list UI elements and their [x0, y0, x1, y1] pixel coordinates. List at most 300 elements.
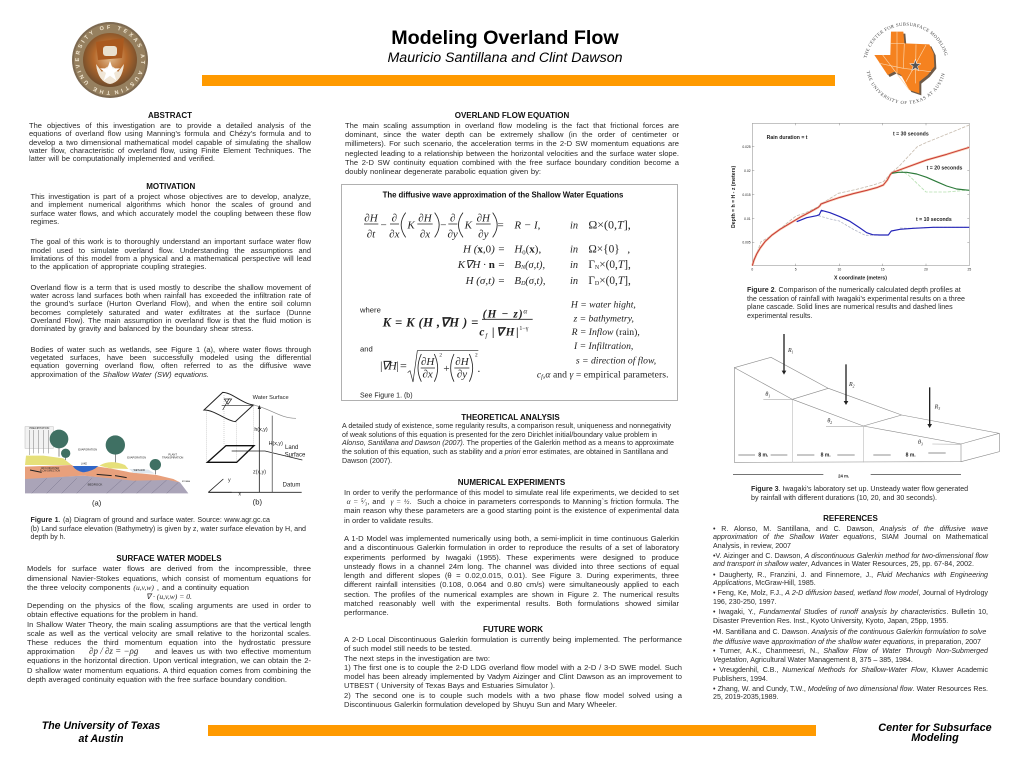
reference: Vreugdenhil [713, 666, 988, 683]
rainfall and slope labels: R [849, 382, 853, 388]
heading: numerical experiments: NUMERICAL EXPERIMENTS [458, 478, 565, 487]
equation system: ∂H [477, 212, 491, 224]
chart annotations: Depth = h = H - z (meters) [731, 166, 737, 228]
theoretical analysis text: Dawson (2007). [342, 457, 392, 465]
variable definitions [537, 299, 668, 381]
variable definitions: R = Inflow (rain), [571, 327, 640, 338]
diagram (a): ground and surface water: GROUNDWATER [41, 467, 60, 470]
abstract text: develop a two dimensional mathematical model capable of simulating the shallow [29, 138, 311, 147]
reference: Feng: • Feng, Ke, Molz, F.J., A 2-D diffusion based, wetland flow model, Journal of Hydrology [713, 589, 988, 597]
surface water models text: depth averaged continuity equation with the free surface boundary condition. [27, 675, 287, 684]
figure 2 caption: the cessation of rainfall with Iwagaki’s experimental results on a three [747, 295, 965, 303]
footer: University of Texas [42, 720, 160, 745]
equation system: ∂x [420, 228, 430, 240]
surface water models text [27, 564, 311, 684]
heading: references: REFERENCES [823, 514, 878, 522]
overland flow text: dominant, since the water depth can be extremely shallow (in the order of centimeter or [345, 130, 679, 139]
footer: University of Texas: at Austin [79, 733, 123, 745]
future work text: 1) The first one is to couple the 2-D LDG overland flow model with a 2-D / 3-D SWE model. Such [344, 663, 682, 672]
diagram (a): ground and surface water: LAKE [81, 462, 87, 465]
reference: Iwagaki: Disaster Prevention Res. Inst., Kyoto University, Kyoto, Japan, 25pp, 1955. [713, 617, 948, 625]
figure 1 caption [30, 516, 306, 541]
heading: overland flow equation: OVERLAND FLOW EQUATION [455, 111, 569, 120]
bottom orange bar [208, 725, 816, 736]
numerical experiments paragraph 2: A 1-D Model was implemented numerically using both, a semi-implicit in time continuous Galerkin [344, 534, 679, 543]
motivation paragraph 4: approximation of the Shallow Water (SW) equations. [30, 370, 209, 379]
labels of diagram (b): z(x,y) [253, 470, 266, 476]
motivation paragraph 3: the ground’s surface (Hurton Overland Flow), and when the entire soil column [30, 299, 311, 308]
equation system: ∂y [478, 228, 489, 240]
axis tick labels: 0.015 [742, 193, 751, 197]
equation: gradient norm: |∇H| = [379, 358, 407, 372]
overland flow text: The 2-D SW continuity equation combined with the free surface boundary condition become a [345, 158, 679, 167]
reference: Feng [713, 589, 988, 606]
surface water models text: These reduces the third momentum equation into the hydrostatic pressure [27, 638, 311, 647]
equation system: in [570, 245, 578, 256]
reference: Turner: Vegetation, Agricultural Water Management 8, 375 – 385, 1984. [713, 656, 913, 664]
motivation paragraph 2: model used to simulate overland flow. Understanding the assumptions and [30, 246, 311, 255]
logo: University of Texas seal: THE UNIVERSITY OF TEXAS AT AUSTIN [75, 25, 145, 95]
diagram (a): ground and surface water: TRANSPIRATION [162, 455, 183, 459]
overland flow text: doubly nonlinear degenerate parabolic equation given by: [345, 167, 541, 176]
surface water models text: ∇ · (u,v,w) = 0. [146, 592, 192, 601]
chart annotations: Rain duration = t [767, 135, 808, 141]
diagram (a): ground and surface water: PLANT [168, 453, 177, 457]
motivation paragraph 1 [30, 192, 311, 226]
equation system: R − I, [513, 219, 541, 231]
reference: Iwagaki [713, 608, 988, 625]
dimension labels: 24 m. [838, 474, 849, 479]
reference: Santillana [713, 628, 986, 646]
reference: Aizinger [713, 552, 988, 568]
box title: The diffusive wave approximation of the Shallow Water Equations [383, 191, 624, 200]
labels of diagram (b): H(x,y) [269, 441, 283, 447]
equation system: (x), [526, 244, 541, 256]
heading: motivation: MOTIVATION [146, 182, 195, 191]
footer: Center for Subsurface Modeling: Center for Subsurface [878, 722, 992, 734]
motivation paragraph 4: vegetated surfaces, have been successfully modeled using the differential [30, 353, 311, 362]
labels of diagram (b): x [238, 492, 241, 498]
equation: gradient norm: 2 [439, 353, 442, 359]
equation system: ×(0,T], [599, 259, 631, 271]
reference: Daugherty: Applications, McGraw-Hill, 1985. [713, 579, 816, 587]
future work text: Discontinuous Galerkin formulation developed by Shuyu Sun and Mary Wheeler. [344, 700, 617, 709]
labels of diagram (b): Surface [285, 452, 306, 458]
figure 2 caption: plane cascade. Solid lines are numerical results and dashed lines [747, 303, 953, 311]
overland flow text: neglected leading to a relationship between the horizontal velocities and the surface water slope. [345, 149, 679, 158]
future work text: A 2-D Local Discontinuous Galerkin formulation is currently being implemented. The performance [344, 635, 682, 644]
future work text: model has been already implemented by Vadym Aizinger and Clint Dawson as an improvement to [344, 672, 682, 681]
axis tick labels [742, 145, 751, 245]
equation system: Ω×(0,T], [588, 217, 631, 231]
equation system: , [627, 244, 630, 256]
dimension labels: 8 m. [906, 453, 916, 459]
labels of diagram (b): y [228, 477, 231, 483]
rainfall and slope labels: 3 [921, 442, 923, 446]
figure 1 caption: depth by h. [30, 533, 66, 541]
equation system: ∂y [448, 228, 458, 240]
axis tick labels: 0.005 [742, 241, 751, 245]
equation: K definition: 1−γ [519, 326, 529, 332]
motivation paragraph 4 [30, 345, 311, 379]
top orange bar [202, 75, 835, 86]
rainfall and slope labels: 2 [853, 384, 855, 388]
rainfall and slope labels: R [935, 405, 938, 411]
surface water models text: equations in the horizontal direction. Upon vertical integration, we can obtain the 2- [27, 656, 311, 665]
labels of diagram (b): (b) [253, 497, 262, 506]
surface water models text: scale as well as the vertical velocity are small relative to the horizontal scales. [27, 629, 311, 638]
variable definitions: s = direction of flow, [576, 355, 656, 366]
abstract text: water flow, characteristic of overland flow, using Finite Element Techniques. The [29, 146, 311, 155]
equation system: ∂x [389, 228, 400, 240]
variable definitions: and γ = empirical parameters. [553, 369, 668, 380]
equation: K definition: |∇H| [492, 326, 519, 338]
heading: surface water models: SURFACE WATER MODELS [116, 554, 222, 563]
panel: equation box [341, 184, 678, 401]
curves [752, 125, 969, 266]
variable definitions: ,α [543, 369, 551, 380]
equation system: D [520, 281, 526, 287]
panel: abstract [29, 111, 311, 163]
equation system: ×(0,T], [599, 275, 631, 287]
x axis tick labels: 15 [881, 268, 885, 272]
logo: Center for Subsurface Modeling: THE CENTER FOR SUBSURFACE MODELING [864, 22, 948, 58]
note: see figure 1 (b): See Figure 1. (b) [360, 393, 413, 400]
abstract text: The objectives of this investigation are to provide a detailed analysis of the [29, 121, 311, 130]
figure 3 caption [751, 485, 968, 502]
equation system: in [570, 260, 578, 271]
equation system: in [570, 276, 578, 287]
theoretical analysis text: A detailed study of existence, some regularity results, a comparison result, uniqueness and nonnegativity [342, 422, 671, 430]
panel: figure 1 [24, 392, 306, 541]
equation: K definition: K = K (H ,∇H ) = [382, 316, 478, 330]
surface water models text: the three velocity components (u,v,w) , and a continuity equation [27, 583, 249, 592]
reference: Turner: • Turner, A.K., Chanmeesri, N., Shallow Flow of Water Through Non-Submerged [713, 647, 988, 655]
rainfall and slope labels: θ [827, 419, 830, 425]
reference: Feng: 196, 230-250, 1997. [713, 598, 777, 606]
panel: overland flow equation [345, 111, 679, 176]
x axis tick labels [751, 268, 971, 272]
rainfall and slope labels: θ [918, 440, 921, 446]
equation system: H [514, 244, 522, 256]
numerical experiments paragraph 1: In order to verify the performance of this model to simulate real life experiments, we decided to set [344, 488, 679, 497]
reference: Santillana: •M. Santillana and C. Dawson. Analysis of the continuous Galerkin formulation to solve [713, 628, 986, 636]
numerical experiments paragraph 2: experiments performed by Iwagaki (1955). These experiments were designed to produce [344, 553, 679, 562]
labels of diagram (b): Water Surface [253, 395, 289, 401]
motivation paragraph 3: Overland Flow). The main assumption in overland flow is that the fluid motion is [30, 316, 311, 325]
panel: surface water models [27, 554, 311, 684]
authors subtitle: Mauricio Santillana and Clint Dawson [387, 50, 622, 66]
equation system: ∂t [367, 228, 376, 240]
label: where: where [359, 305, 381, 314]
diagram (a): ground and surface water: EVAPORATION [78, 448, 97, 452]
x axis tick labels: 0 [751, 268, 753, 272]
reference: Daugherty: • Daugherty, R., Franzini, J. and Finnemore, J., Fluid Mechanics with Engineering [713, 570, 988, 578]
motivation paragraph 1: surface water flows, and which accurately model the coupling between these flow [30, 209, 311, 218]
rainfall and slope labels: θ [765, 392, 768, 398]
numerical experiments paragraph 2: performance. [344, 608, 389, 617]
abstract text: latter will be computationally implemented and verified. [29, 154, 215, 163]
numerical experiments paragraph 2: unsteady flows in a channel 24m long. The channel was divided into three sections of equal [344, 562, 679, 571]
equation system: ∂H [364, 212, 379, 224]
motivation paragraph 3: Overland flow is a term that is used mostly to describe the shallow movement of [30, 283, 311, 292]
equation: gradient norm: + [443, 363, 450, 375]
numerical experiments paragraph 2: section. The profiles of the numerical examples are shown in Figure 2. The numerical results [344, 590, 679, 599]
label (a): (a) [92, 499, 102, 508]
chart annotations: X coordinate (meters) [834, 276, 887, 282]
motivation paragraph 4: equation governing overland flow, often referred to as the diffusive wave [30, 361, 311, 370]
future work text: of such model still needs to be tested. [344, 644, 472, 653]
labels of diagram (b) [228, 395, 306, 506]
surface water models text: and leaves us with two effective momentum [155, 647, 311, 656]
heading: future work: FUTURE WORK [483, 625, 543, 634]
equation system: K [464, 219, 473, 231]
equation: gradient norm: ∂H [455, 356, 470, 368]
labels of diagram (b): Land [285, 445, 298, 451]
diagram (a): ground and surface water [25, 426, 190, 493]
motivation paragraph 3: water across land surfaces both when rainfall has exceeded the infiltration rate of [30, 291, 311, 300]
surface water models text: obtain effective equations for the problem in hand. [27, 610, 198, 619]
equation: K definition: c [479, 326, 484, 338]
overland flow text: The main scaling assumption in overland flow modeling is the fact that frictional forces are [345, 121, 679, 130]
numerical experiments paragraph 2: matched reasonably well with the experimental results. Both formulations showed similar [344, 599, 679, 608]
surface water models text: dimensional Navier-Stokes equations, which consist of momentum equations for [27, 574, 311, 583]
surface water models text: Models for surface water flows are derived from the incompressible, three [27, 564, 311, 573]
equation system: K [406, 219, 415, 231]
figure 3 caption: by rainfall with different durations (10, 20, and 30 seconds). [751, 494, 937, 502]
motivation paragraph 1: and implement numerical algorithms which honor the scales of ground and [30, 200, 311, 209]
figure 2 caption [747, 286, 965, 320]
equation system: ∂H [418, 212, 433, 224]
footer: Center for Subsurface Modeling: Modeling [911, 732, 959, 744]
motivation paragraph 2: The goal of this work is to thoroughly understand an important surface water flow [30, 237, 311, 246]
numerical experiments paragraph 2: length and different slopes (θ = 0.02,0.015, 0.01). See Figure 3. During experiments, three [344, 571, 679, 580]
footer: University of Texas: The University of Texas [42, 720, 160, 732]
equation system: (σ,t), [525, 260, 545, 271]
motivation paragraph 4: Bodies of water such as wetlands, see Figure 1 (a), where water flows through [30, 345, 311, 354]
axis tick labels: 0.02 [744, 169, 751, 173]
panel: figure 3 [733, 334, 1000, 502]
reference: Zhang: 25, 2019-2035,1989. [713, 693, 778, 701]
reference: Alonso: approximation of the Shallow Water equations, SIAM Journal on Mathematical [713, 533, 988, 541]
variable definitions: I = Infiltration, [573, 341, 633, 352]
abstract text: equations of overland flow using Manning’s formula and Chézy’s formula and to [29, 129, 311, 138]
reference: Zhang: • Zhang, W. and Cundy, T.W., Modeling of two dimensional flow. Water Resources Res. [713, 685, 988, 693]
labels of diagram (b): Datum [283, 483, 300, 489]
variable definitions: f [541, 374, 544, 381]
reference: Vreugdenhil: • Vreugdenhil, C.B., Numerical Methods for Shallow-Water Flow, Kluwer Academic [713, 666, 988, 674]
equation system: in [570, 220, 578, 231]
equation: gradient norm: ∂x [423, 368, 433, 380]
numerical experiments paragraph 1 [344, 488, 679, 525]
equation system: B [514, 275, 521, 287]
equation system: H (σ,t) = [465, 275, 505, 287]
future work text: UTBEST ( University of Texas Bays and Estuaries Simulator ). [344, 681, 555, 690]
theoretical analysis text: of weak solutions of this equation is presented for the zero Dirichlet initial/boundary value problem in [342, 431, 657, 439]
reference: Aizinger: and transport in shallow water, Advances in Water Resources, 25, pp. 67-84, 2002. [713, 560, 974, 568]
theoretical analysis text [342, 422, 674, 465]
equation system [364, 212, 631, 287]
dimension labels [758, 453, 916, 479]
axis tick labels: 0.025 [742, 145, 751, 149]
reference: Santillana: the diffusive wave approximation of the shallow water equations, in preparation, 2007 [713, 638, 981, 646]
chart annotations: t = 30 seconds [893, 132, 929, 138]
variable definitions: c [537, 369, 551, 381]
equation: K definition: α [523, 306, 527, 315]
variable definitions: H = water hight, [570, 299, 636, 310]
rainfall and slope labels: 1 [792, 350, 794, 354]
diagram (b): surface elevation sketch [204, 392, 302, 492]
equation system: − [381, 219, 387, 231]
equation system: ∂ [450, 212, 455, 224]
future work text [344, 635, 682, 709]
rainfall and slope labels [765, 348, 940, 446]
cascade geometry [734, 357, 999, 462]
reference: Vreugdenhil: Publishers, 1994. [713, 675, 768, 683]
rainfall arrows [782, 334, 932, 428]
equation: K definition: f [485, 332, 488, 339]
motivation paragraph 1: This investigation is part of a project whose objectives are to develop, analyze, [30, 192, 311, 201]
reference: Iwagaki: • Iwagaki, Y., Fundamental Studies of runoff analysis by characteristics. Bulletin 10, [713, 608, 988, 616]
dimension labels: 8 m. [758, 453, 769, 459]
motivation paragraph 2: limitations of this model from a physical and a mathematical perspective will lead [30, 254, 311, 263]
equation system: Γ [588, 259, 595, 271]
equation system: H (x,0) = [462, 244, 505, 256]
equations [359, 191, 668, 400]
equation: gradient norm: . [477, 361, 480, 375]
equation system: N [595, 265, 600, 271]
equation: K definition [382, 306, 533, 339]
surface water models text: approximation [27, 647, 75, 656]
x axis tick labels: 25 [967, 268, 971, 272]
equation: gradient norm: ∂y [457, 368, 467, 380]
equation: K definition: (H − z) [483, 308, 523, 320]
labels of diagram (b): h(x,y) [254, 427, 268, 433]
equation system: − [440, 219, 446, 231]
reference: Turner [713, 647, 988, 664]
equation system: ∂ [392, 212, 397, 224]
panel: theoretical analysis [342, 413, 674, 465]
motivation paragraph 3: dominated by gravity and balanced by the boundary shear stress. [30, 324, 254, 333]
surface water models text: Depending on the physics of the flow, scaling arguments are used in order to [27, 601, 311, 610]
logo: Center for Subsurface Modeling: THE UNIVERSITY OF TEXAS AT AUSTIN [866, 70, 945, 104]
theoretical analysis text: the solution of this equation, such as stability and a priori error estimates, are obtained in Santillana and [342, 448, 668, 456]
numerical experiments paragraph 1: main reason why these parameters are a good starting point is the existence of experimental data [344, 506, 679, 515]
surface water models text: In Shallow Water Theory, the main scaling assumptions are that the vertical length [27, 620, 311, 629]
x axis tick labels: 20 [924, 268, 928, 272]
line chart of depth profiles [731, 123, 972, 282]
title: Modeling Overland Flow [391, 27, 619, 49]
reference: Daugherty [712, 570, 988, 587]
motivation paragraph 3 [30, 283, 311, 333]
future work text: The next steps in the investigation are two: [344, 654, 490, 663]
rainfall and slope labels: 2 [830, 421, 832, 425]
diagram (a): ground and surface water: BEDROCK [88, 483, 102, 487]
numerical experiments paragraph 2: and a discontinuous Galerkin formulation in order to reproduce the results of a set of laboratory [344, 543, 679, 552]
motivation paragraph 2: to the application of appropriate coupling strategies. [30, 262, 206, 271]
equation system: Ω×{0} [588, 244, 620, 256]
equation system: B [514, 259, 521, 271]
reference: Alonso [713, 524, 988, 550]
logo: Center for Subsurface Modeling [864, 22, 948, 104]
figure 1 diagrams [24, 392, 306, 508]
x axis tick labels: 10 [837, 268, 841, 272]
equation system: (σ,t), [525, 276, 545, 287]
equation system: Γ [588, 275, 595, 287]
figure 1 caption: Figure 1. (a) Diagram of ground and surface water. Source: www.agr.gc.ca [30, 516, 270, 524]
axis tick labels: 0.01 [744, 217, 751, 221]
numerical experiments paragraph 1: in order to validate results. [344, 516, 433, 525]
figure 2 caption: Figure 2. Comparison of the numerically calculated depth profiles at [747, 286, 961, 294]
overland flow text: millimeters). For such scenario, the acceleration terms in the 2-D SW momentum equations are [345, 139, 679, 148]
numerical experiments paragraph 1: α = ⁵⁄₃, and γ = ½. Such a choice in parameters corresponds to Manning`s friction formula. The [347, 497, 679, 506]
equation system: 0 [522, 250, 526, 257]
diagram (a): ground and surface water: FLOW DIRECTION [40, 471, 60, 473]
panel: references [712, 514, 988, 701]
rainfall and slope labels: R [788, 348, 792, 354]
diagram (a): ground and surface water: EVAPORATION [127, 455, 146, 459]
panel: motivation [30, 182, 311, 379]
cascade diagram [733, 334, 1000, 479]
dimension labels: 8 m. [821, 453, 831, 459]
footer: Center for Subsurface Modeling [865, 722, 1005, 744]
heading: abstract: ABSTRACT [148, 111, 192, 120]
label: and: and [360, 344, 373, 353]
reference: Alonso: • R. Alonso, M. Santillana, and C. Dawson, Analysis of the diffusive wave [713, 524, 988, 532]
figure 2 caption: experimental results. [747, 312, 812, 320]
numerical experiments paragraph 2: different rainfall intensities (0.108, 0.064 and 0.80 cm/s) were simultaneously applied to each [344, 580, 679, 589]
panel: future work [344, 625, 682, 709]
equation system: = [498, 219, 504, 231]
overland flow text [345, 121, 679, 176]
equation system: D [595, 281, 600, 287]
diagram (a): ground and surface water: STREAM [182, 480, 190, 483]
equation: gradient norm: 2 [475, 353, 478, 359]
variable definitions: z = bathymetry, [572, 314, 634, 325]
heading: theoretical analysis: THEORETICAL ANALYSIS [461, 413, 560, 422]
diagram (a): ground and surface water: WETLAND [134, 469, 145, 472]
chart annotations: t = 20 seconds [927, 166, 962, 172]
panel: numerical experiments [344, 478, 679, 617]
future work text: 2) The second one is to couple such models with a two phase flow model solved using a [344, 691, 682, 700]
motivation paragraph 1: regimes. [30, 217, 59, 226]
figure 1 caption: (b) Land surface elevation (Bathymetry) is given by z, water surface elevation by H, and [30, 525, 306, 533]
equation: gradient norm: ∂H [421, 356, 435, 368]
diagram (a): ground and surface water: PRECIPITATION [29, 426, 49, 430]
motivation paragraph 2 [30, 237, 311, 271]
equation system: N [520, 265, 526, 271]
rainfall and slope labels: 3 [938, 407, 940, 411]
reference: Zhang [713, 685, 988, 702]
surface water models text: ∂p / ∂z = −ρg [89, 646, 138, 656]
length dimensions [733, 453, 961, 475]
panel: figure 2 chart [731, 123, 972, 282]
surface water models text: D shallow water momentum equations. A third equation comes from combining the [27, 666, 311, 675]
plot frame and ticks [752, 123, 969, 266]
equation system: K∇H · n = [457, 259, 505, 271]
figure 3 caption: Figure 3. Iwagaki’s laboratory set up. Unsteady water flow generated [751, 485, 968, 493]
chart annotations: t = 10 seconds [916, 217, 952, 223]
x axis tick labels: 5 [795, 268, 797, 272]
reference: Alonso: Analysis, in review, 2007 [713, 542, 791, 550]
chart annotations [731, 132, 962, 282]
abstract text [29, 121, 311, 163]
motivation paragraph 3: becomes completely saturated and water exfiltrates at the surface (Dunne [30, 308, 311, 317]
equation: gradient norm [379, 351, 480, 382]
theoretical analysis text: Alonso, Santillana and Dawson (2007). The properties of the Galerkin method as a means to approximate [342, 439, 674, 447]
rainfall and slope labels: 1 [768, 394, 770, 398]
numerical experiments paragraph 2 [344, 534, 679, 617]
